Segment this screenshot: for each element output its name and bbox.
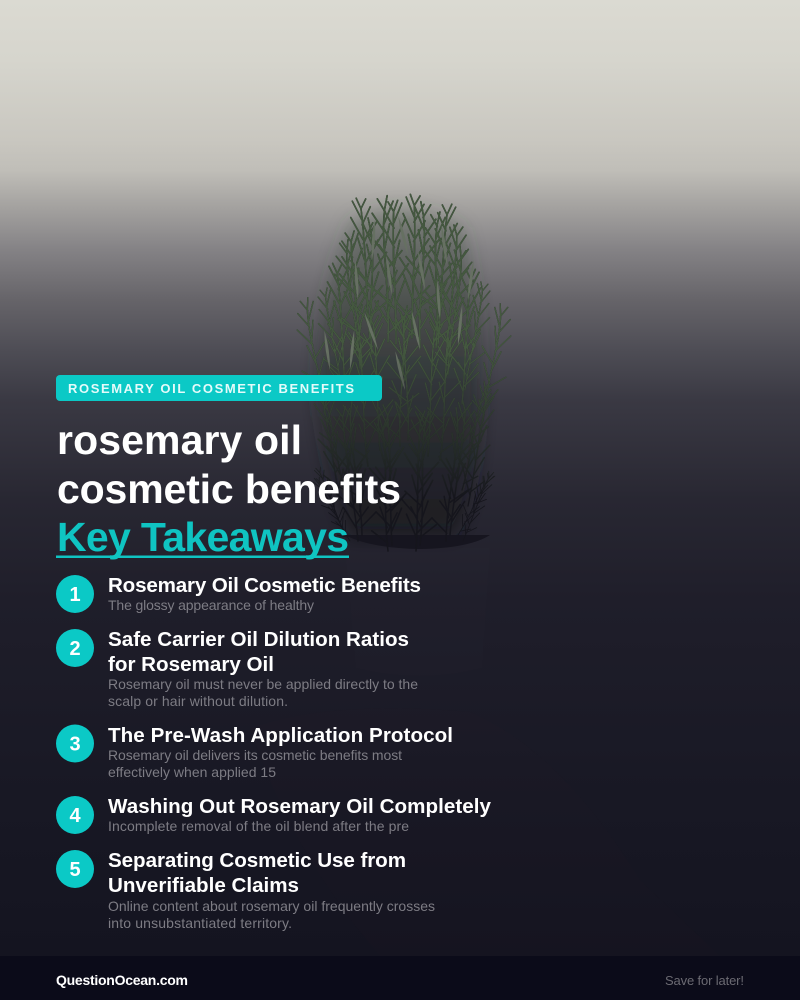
footer background xyxy=(0,956,800,1000)
plant green upper foliage xyxy=(296,194,512,480)
badge label: ROSEMARY OIL COSMETIC BENEFITS xyxy=(68,381,354,396)
title 5: Unverifiable Claims xyxy=(108,874,299,897)
number 3: 3 xyxy=(69,734,81,756)
title 2: for Rosemary Oil xyxy=(108,653,274,676)
description 3: Rosemary oil delivers its cosmetic benefits most xyxy=(108,747,402,763)
description 2: scalp or hair without dilution. xyxy=(108,693,288,709)
number badge 2 xyxy=(56,629,94,667)
description 2: Rosemary oil must never be applied directly to the xyxy=(108,676,418,692)
heading line two: cosmetic benefits xyxy=(57,466,401,512)
takeaway 5 xyxy=(56,849,435,931)
number 2: 2 xyxy=(69,638,81,660)
title 5: Separating Cosmetic Use from xyxy=(108,849,406,872)
description 4: Incomplete removal of the oil blend after the pre xyxy=(108,818,409,834)
category badge xyxy=(56,375,382,401)
number 1: 1 xyxy=(69,584,81,606)
title 3: The Pre-Wash Application Protocol xyxy=(108,724,453,747)
title 2 xyxy=(108,628,409,676)
takeaway 3 xyxy=(56,724,453,780)
takeaway 2 xyxy=(56,628,418,709)
plant foliage soft mass xyxy=(318,210,480,535)
description 5 xyxy=(108,898,435,931)
footer save note: Save for later! xyxy=(665,973,744,988)
description 3: effectively when applied 15 xyxy=(108,764,276,780)
title 5 xyxy=(108,849,406,897)
title 4: Washing Out Rosemary Oil Completely xyxy=(108,795,492,818)
badge background xyxy=(56,375,382,401)
number 5: 5 xyxy=(69,859,81,881)
number badge 3 xyxy=(56,724,94,762)
heading key takeaways: Key Takeaways xyxy=(57,514,349,560)
title 2: Safe Carrier Oil Dilution Ratios xyxy=(108,628,409,651)
heading line one: rosemary oil xyxy=(57,417,302,463)
plant soil shadow xyxy=(345,535,490,549)
heading underline xyxy=(56,556,349,558)
footer site name: QuestionOcean.com xyxy=(56,972,188,988)
description 1: The glossy appearance of healthy xyxy=(108,597,314,613)
description 5: Online content about rosemary oil frequently crosses xyxy=(108,898,435,914)
takeaway 4 xyxy=(56,795,492,834)
number badge 1 xyxy=(56,575,94,613)
rosemary plant xyxy=(290,194,518,552)
description 5: into unsubstantiated territory. xyxy=(108,915,292,931)
number badge 4 xyxy=(56,796,94,834)
description 3 xyxy=(108,747,402,780)
faint hand silhouette xyxy=(250,708,720,956)
description 2 xyxy=(108,676,418,709)
takeaway 1 xyxy=(56,574,421,613)
faint plant pot xyxy=(345,548,490,676)
number badge 5 xyxy=(56,850,94,888)
main heading xyxy=(56,417,401,560)
title 1: Rosemary Oil Cosmetic Benefits xyxy=(108,574,421,597)
number 4: 4 xyxy=(69,805,81,827)
plant dark lower foliage xyxy=(290,194,518,552)
footer bar xyxy=(0,956,800,1000)
